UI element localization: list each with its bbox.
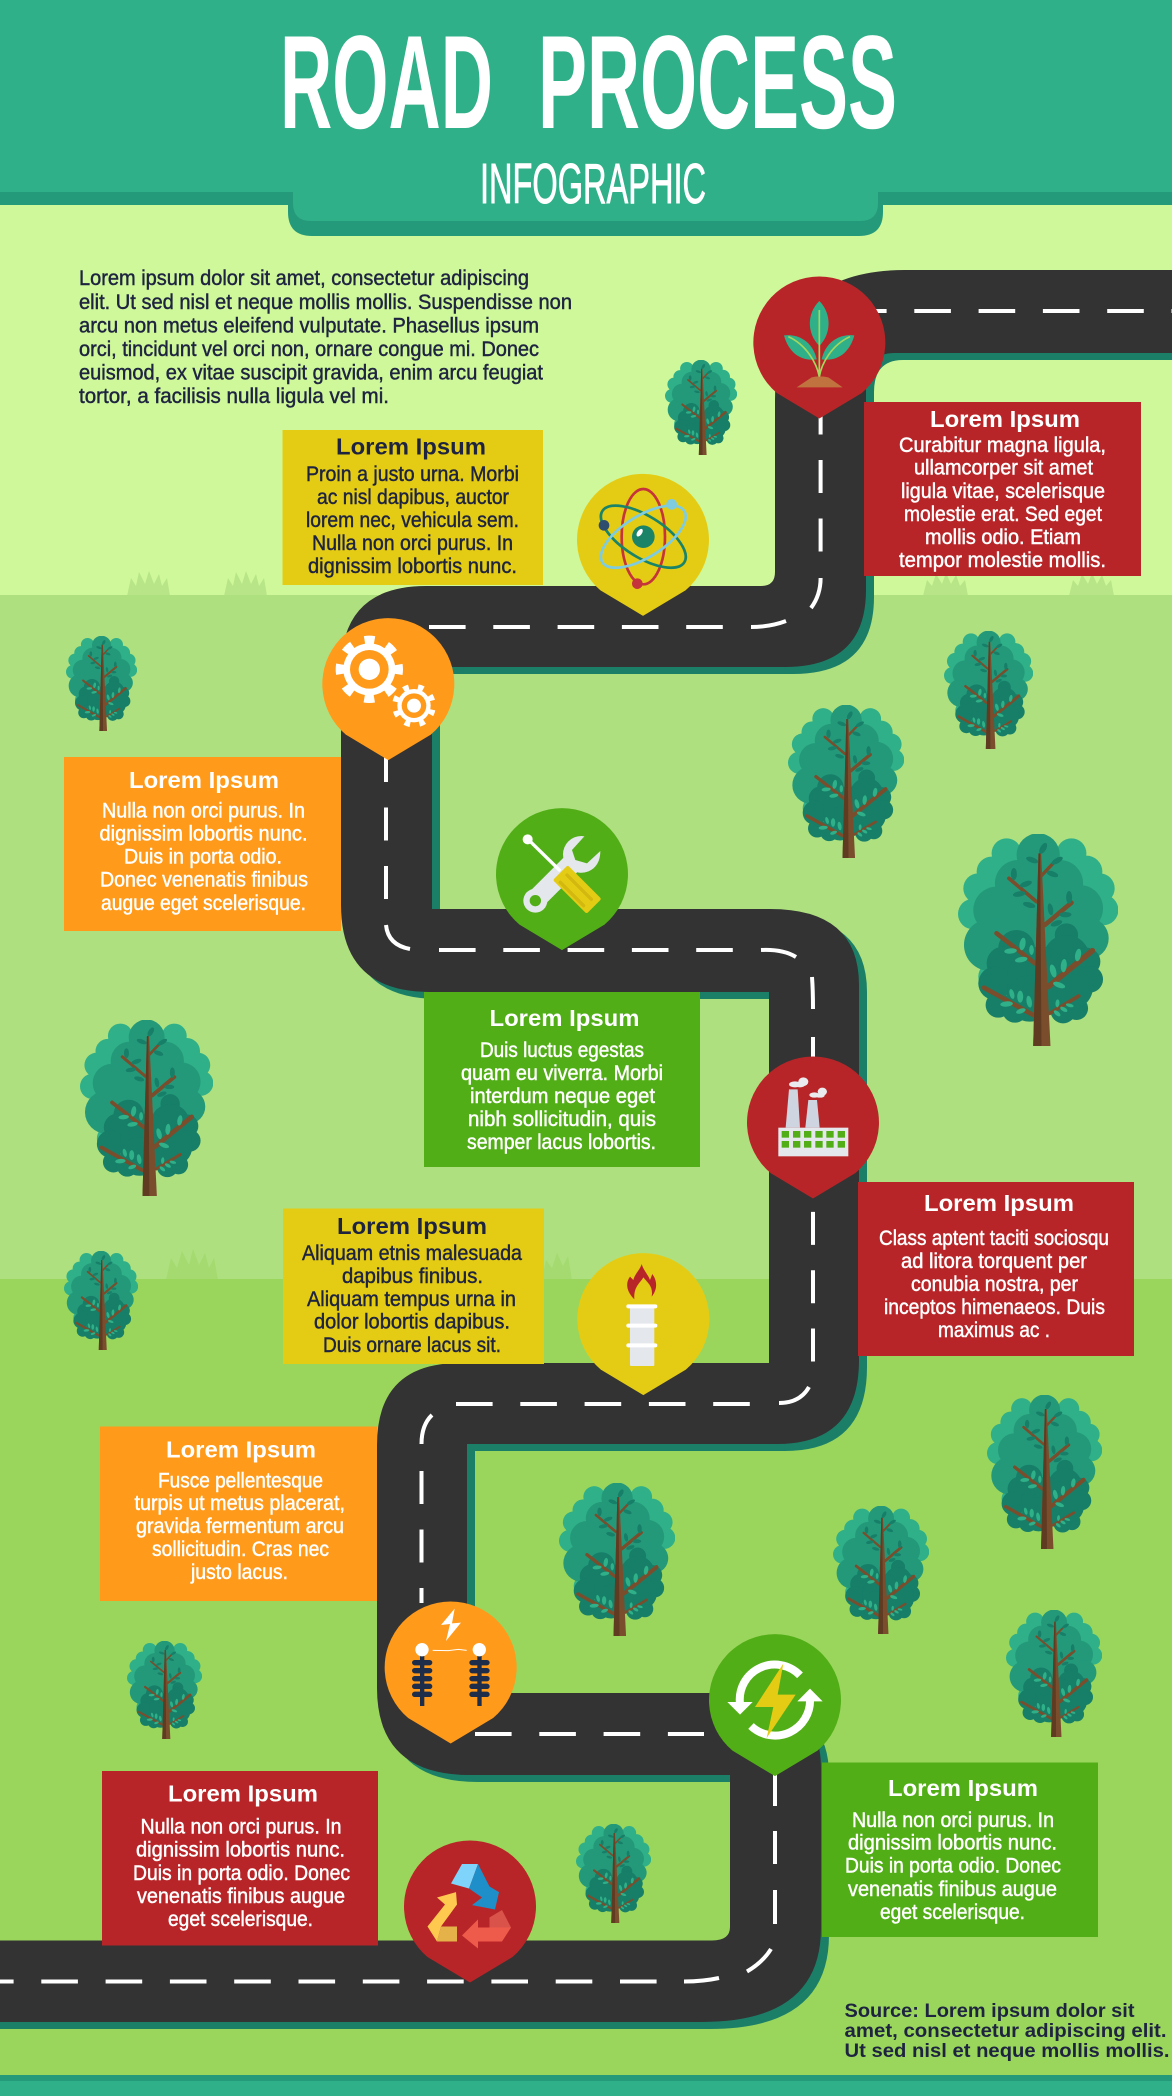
tree 5 [958, 833, 1118, 1046]
body text [134, 1470, 345, 1584]
body text: interdum neque eget [470, 1085, 655, 1108]
pin: sprout [753, 277, 885, 418]
heading: Lorem Ipsum [490, 1005, 640, 1031]
body text: quam eu viverra. Morbi [461, 1062, 663, 1085]
body text: nibh sollicitudin, quis [468, 1108, 656, 1131]
body text: turpis ut metus placerat, [134, 1492, 345, 1515]
icon: electrical insulators [415, 1609, 487, 1706]
body text: dignissim lobortis nunc. [136, 1838, 345, 1862]
body text [879, 1227, 1109, 1342]
pin: tools [496, 808, 628, 950]
panel: yellow box two [283, 1208, 544, 1364]
pin: renewable energy [709, 1634, 841, 1776]
body text: Donec venenatis finibus [100, 868, 308, 892]
body text [899, 434, 1106, 572]
heading: Lorem Ipsum [336, 434, 486, 460]
icon: energy cycle [727, 1664, 823, 1738]
body text: ac nisl dapibus, auctor [317, 486, 509, 509]
body text: gravida fermentum arcu [136, 1515, 344, 1538]
intro paragraph: elit. Ut sed nisl et neque mollis mollis. Suspendisse non [79, 291, 572, 314]
panel: red box three [102, 1771, 378, 1946]
icon: factory [778, 1077, 848, 1156]
source note [844, 2001, 1170, 2062]
title: ROAD [280, 9, 493, 157]
icon: gears [340, 640, 438, 730]
body text: ad litora torquent per [901, 1250, 1087, 1273]
body text: tempor molestie mollis. [899, 549, 1106, 572]
pin: torch [577, 1253, 709, 1395]
body text: dolor lobortis dapibus. [314, 1310, 510, 1334]
body text: semper lacus lobortis. [467, 1131, 656, 1154]
body text: molestie erat. Sed eget [904, 503, 1102, 526]
body text: Nulla non orci purus. In [312, 532, 513, 555]
body text: eget scelerisque. [168, 1908, 313, 1931]
icon: recycling arrows [428, 1864, 511, 1948]
body text: eget scelerisque. [880, 1901, 1025, 1924]
background: middle meadow band [0, 595, 1172, 1285]
body text: Nulla non orci purus. In [852, 1809, 1054, 1832]
tree 6 [80, 1019, 213, 1196]
tree 2 [66, 636, 137, 731]
tree 3 [944, 631, 1033, 749]
body text: conubia nostra, per [911, 1273, 1078, 1296]
body text: Nulla non orci purus. In [140, 1816, 342, 1838]
panel: red box top right [864, 402, 1141, 576]
icon: gas flare [626, 1264, 657, 1366]
tree 13 [576, 1824, 651, 1923]
pin: gears [322, 618, 454, 760]
tree 1 [665, 360, 737, 455]
body text: augue eget scelerisque. [101, 892, 306, 915]
tree 4 [788, 705, 904, 858]
intro paragraph: tortor, a facilisis nulla ligula vel mi. [79, 385, 389, 408]
panel: red box two [858, 1182, 1134, 1356]
heading: Lorem Ipsum [129, 767, 279, 793]
pin: atom [577, 474, 709, 616]
body text: justo lacus. [190, 1561, 288, 1584]
body text: ullamcorper sit amet [914, 456, 1093, 480]
panel: green box two [822, 1762, 1098, 1937]
title: PROCESS [538, 9, 897, 157]
body text: inceptos himenaeos. Duis [884, 1296, 1105, 1319]
body text [461, 1039, 663, 1154]
body text: dignissim lobortis nunc. [308, 555, 517, 578]
pin: recycling [404, 1841, 536, 1982]
bushes on the middle band [166, 1249, 572, 1280]
tree 10 [833, 1506, 929, 1634]
intro paragraph [79, 267, 572, 408]
icon: wrench and screwdriver [523, 830, 607, 914]
heading: Lorem Ipsum [888, 1775, 1038, 1801]
body text: Duis in porta odio. Donec [133, 1862, 350, 1885]
body text: dignissim lobortis nunc. [848, 1832, 1057, 1854]
body text: venenatis finibus augue [137, 1885, 345, 1908]
heading: Lorem Ipsum [924, 1190, 1074, 1216]
panel: orange box two [100, 1426, 377, 1601]
body text: Duis in porta odio. Donec [845, 1854, 1061, 1878]
body text: Aliquam etnis malesuada [302, 1242, 522, 1265]
footer bar [0, 2075, 1172, 2096]
source note: amet, consectetur adipiscing elit. [844, 2021, 1166, 2042]
header banner [0, 0, 1172, 236]
intro paragraph: arcu non metus eleifend vulputate. Phasellus ipsum [79, 314, 539, 338]
panel: orange box one [64, 757, 341, 931]
heading: Lorem Ipsum [168, 1780, 318, 1806]
background: lower meadow band [0, 1279, 1172, 2096]
body text: Nulla non orci purus. In [102, 800, 305, 822]
panel: green box one [424, 992, 700, 1167]
panel: yellow box one [282, 430, 543, 585]
body text: Curabitur magna ligula, [899, 434, 1106, 457]
body text: Aliquam tempus urna in [307, 1288, 516, 1311]
icon: atom [591, 489, 695, 589]
body text [100, 800, 308, 915]
body text: ligula vitae, scelerisque [901, 480, 1105, 503]
body text [845, 1809, 1061, 1924]
heading: Lorem Ipsum [930, 406, 1080, 432]
body text [302, 1242, 522, 1357]
intro paragraph: euismod, ex vitae suscipit gravida, enim arcu feugiat [79, 362, 543, 384]
body text: Class aptent taciti sociosqu [879, 1227, 1109, 1250]
body text: Duis ornare lacus sit. [323, 1334, 501, 1357]
body text: Fusce pellentesque [158, 1470, 323, 1492]
body text: lorem nec, vehicula sem. [306, 509, 519, 532]
background: light sky band [0, 0, 1172, 600]
body text: venenatis finibus augue [848, 1878, 1057, 1901]
pin: insulators [385, 1602, 517, 1743]
tree 12 [127, 1641, 202, 1739]
body text [133, 1816, 350, 1931]
tree 9 [559, 1483, 675, 1636]
source note: Source: Lorem ipsum dolor sit [844, 2001, 1135, 2022]
body text: sollicitudin. Cras nec [152, 1538, 329, 1561]
bushes on the light band [127, 571, 1114, 596]
heading: Lorem Ipsum [337, 1213, 487, 1239]
body text: Duis luctus egestas [480, 1039, 644, 1062]
icon: sprout [784, 301, 854, 387]
body text: dapibus finibus. [342, 1265, 483, 1288]
title [280, 9, 897, 157]
subtitle: INFOGRAPHIC [480, 152, 706, 216]
intro paragraph: Lorem ipsum dolor sit amet, consectetur adipiscing [79, 267, 529, 290]
heading: Lorem Ipsum [166, 1436, 316, 1462]
tree 8 [987, 1395, 1102, 1549]
body text: maximus ac . [938, 1319, 1050, 1342]
source note: Ut sed nisl et neque mollis mollis. [844, 2041, 1170, 2062]
body text: dignissim lobortis nunc. [100, 822, 308, 846]
tree 7 [64, 1251, 138, 1350]
body text: Duis in porta odio. [124, 846, 282, 868]
body text: Proin a justo urna. Morbi [306, 463, 519, 486]
tree 11 [1006, 1610, 1102, 1737]
road centre dashes [0, 311, 1172, 1982]
trees scattered over the meadow [64, 360, 1118, 1923]
pin: factory [747, 1057, 879, 1198]
body text: mollis odio. Etiam [925, 526, 1081, 549]
intro paragraph: orci, tincidunt vel orci non, ornare congue mi. Donec [79, 338, 539, 361]
body text [306, 463, 519, 578]
